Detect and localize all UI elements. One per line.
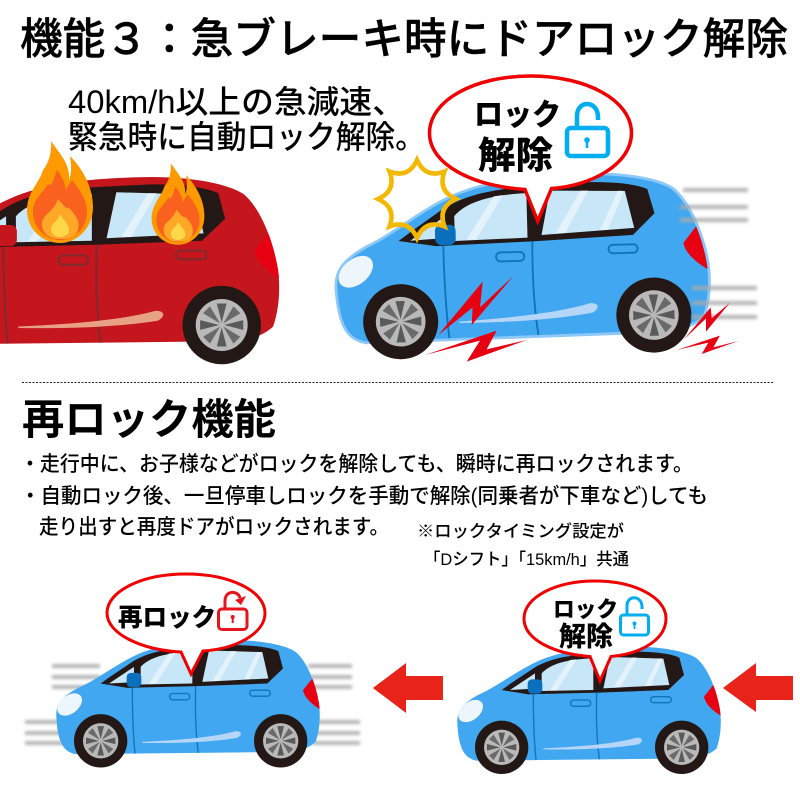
note: lock timing setting: ※ロックタイミング設定が	[417, 521, 624, 541]
text block: emergency unlock description: 緊急時に自動ロック解除。	[68, 119, 425, 155]
red car with flames	[0, 141, 279, 364]
text block: emergency unlock description	[68, 84, 425, 155]
text block: bullet points	[20, 453, 708, 539]
blue car: re-lock	[25, 640, 360, 767]
bubble label: ロック	[553, 597, 618, 622]
icon: open blue padlock small	[620, 598, 648, 635]
speech bubble: re-lock	[107, 574, 265, 674]
blue car	[330, 172, 710, 361]
icon: open blue padlock	[567, 104, 608, 156]
speed lines	[25, 666, 360, 743]
bubble label	[474, 99, 561, 176]
note: lock timing setting: 「Dシフト」「15km/h」共通	[424, 550, 629, 569]
bubble label: ロック	[474, 99, 561, 132]
section heading: 再ロック機能	[22, 396, 276, 443]
icon: small flame	[152, 163, 204, 245]
icon: red re-lock padlock	[218, 592, 247, 630]
arrow: red left, right edge	[723, 663, 793, 712]
speech bubble: unlock small	[524, 581, 666, 681]
bubble label: 解除	[478, 135, 553, 176]
blue car: unlocked	[454, 647, 721, 774]
text block: bullet points: ・自動ロック後、一旦停車しロックを手動で解除(同乗者が下車など)しても	[20, 485, 708, 508]
dashed divider	[22, 382, 774, 384]
red car	[0, 177, 279, 364]
text block: bullet points: ・走行中に、お子様などがロックを解除しても、瞬時に再ロックされます。	[20, 453, 693, 476]
note: lock timing setting	[417, 521, 629, 569]
icon: impact starburst	[378, 160, 456, 238]
arrow: red left, centre	[373, 663, 443, 713]
title: 機能３：急ブレーキ時にドアロック解除	[20, 16, 788, 64]
icon: red skid lightning bolts	[425, 276, 738, 362]
blue car braking	[330, 160, 757, 362]
icon: large flame	[27, 141, 93, 243]
bubble label: 再ロック	[118, 604, 216, 632]
bubble label	[553, 597, 618, 652]
speed lines	[680, 190, 757, 317]
text block: bullet points: 走り出すと再度ドアがロックされます。	[39, 516, 389, 539]
bubble label: 解除	[559, 622, 613, 652]
text block: emergency unlock description: 40km/h以上の急減速、	[68, 84, 405, 120]
speech bubble: unlock	[430, 76, 632, 221]
car	[53, 640, 320, 767]
